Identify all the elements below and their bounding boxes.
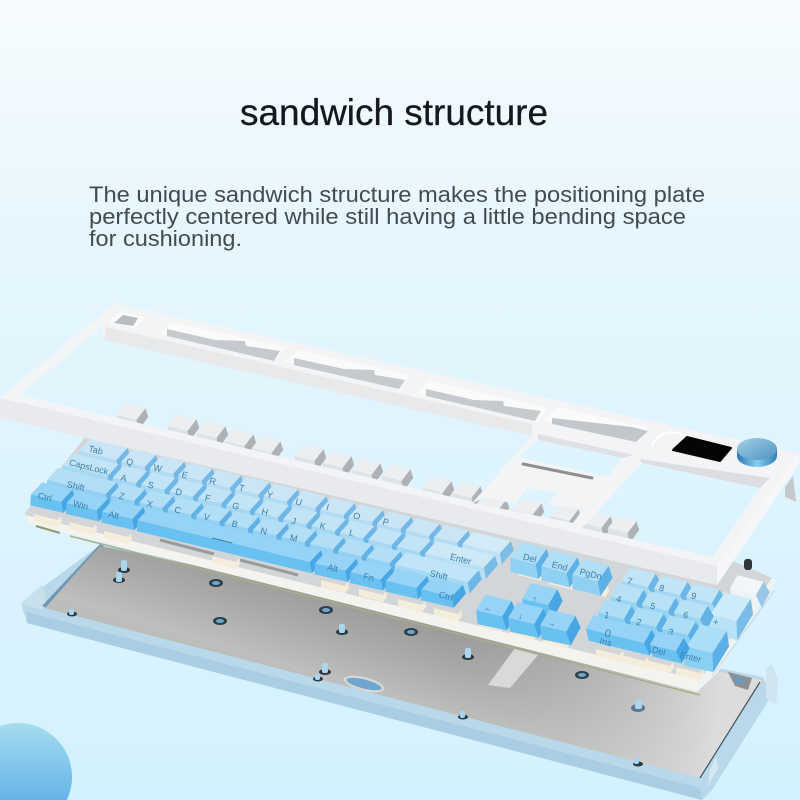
- row: caps legends: G: [231, 500, 240, 512]
- right bar front face: [717, 453, 800, 585]
- numeric keypad: 6: [682, 610, 689, 621]
- numeric keypad: 5: [649, 601, 656, 612]
- standoff posts: [67, 560, 645, 766]
- description text: perfectly centered while still having a little bending space: [89, 204, 686, 229]
- function row white keycaps: [108, 403, 647, 544]
- row: tab legends: R: [208, 475, 218, 487]
- corner bracket: [728, 672, 752, 690]
- row: shift keys: [36, 468, 492, 594]
- board shadow line: [36, 526, 60, 533]
- right rail light tab: [766, 664, 778, 704]
- right rail dark gap: [700, 682, 760, 778]
- title: sandwich structure: [240, 92, 548, 133]
- row: tab legends: Q: [125, 456, 134, 468]
- navigation keys: PgDn: [579, 567, 603, 582]
- row: caps legends: D: [174, 486, 184, 498]
- numeric keypad: 3: [667, 627, 674, 638]
- row: tab legends: W: [152, 462, 164, 474]
- row: shift legends: N: [259, 525, 268, 537]
- row: tab legends: Tab: [87, 443, 104, 457]
- bottom case tray: [21, 544, 778, 800]
- numeric keypad: +: [712, 617, 719, 628]
- row: bottom legends: Win: [72, 498, 89, 512]
- row: bottom legends: Fn: [362, 571, 375, 583]
- rear slot recess 2: [285, 350, 410, 388]
- numeric keypad: [576, 551, 778, 673]
- row: caps legends: K: [319, 521, 327, 532]
- numeric keypad: 8: [658, 583, 665, 594]
- circuit board layer: [25, 437, 777, 695]
- row: caps legends: H: [260, 506, 269, 518]
- arrow keys: ↑: [531, 594, 538, 604]
- oval slot: [342, 672, 386, 696]
- row: bottom legends: Ctrl: [438, 590, 454, 603]
- front face of rear bar: [104, 327, 532, 436]
- navigation keys: Del: [522, 552, 537, 565]
- row: caps legends: [68, 457, 472, 567]
- row: shift legends: Shift: [66, 479, 86, 493]
- row: shift legends: X: [146, 499, 154, 510]
- row: bottom keys: [20, 482, 476, 608]
- navigation keys: [499, 542, 623, 596]
- numeric keypad: 0: [603, 628, 612, 641]
- row: shift legends: [66, 479, 449, 582]
- row: shift legends: C: [173, 504, 183, 516]
- right clip: [785, 476, 796, 502]
- board surface: [25, 437, 777, 692]
- row: caps legends: A: [120, 473, 128, 484]
- row: shift legends: M: [289, 532, 299, 544]
- numeric keypad: Enter: [679, 650, 702, 665]
- frame body: [0, 303, 800, 585]
- arrow keys: [466, 583, 590, 646]
- window lip strips: [538, 434, 634, 458]
- arrow keys: →: [546, 617, 557, 629]
- row: shift legends: Z: [118, 491, 126, 502]
- top white frame: [0, 303, 800, 585]
- volume knob: [737, 438, 777, 467]
- transparent side edge: [697, 578, 777, 692]
- spacebar gap strips: [160, 540, 214, 554]
- numeric keypad: 2: [635, 617, 642, 628]
- switch stems: [34, 514, 704, 680]
- row: tab legends: O: [352, 510, 361, 522]
- row: tab legends: E: [181, 470, 189, 481]
- row: shift legends: B: [231, 519, 239, 530]
- row: bottom legends: Alt: [107, 509, 121, 521]
- grey slit: [523, 464, 592, 478]
- row: shift legends: Shift: [429, 568, 449, 582]
- row: caps keys: [52, 453, 508, 579]
- description text: The unique sandwich structure makes the positioning plate: [89, 182, 705, 207]
- description text: for cushioning.: [89, 226, 242, 251]
- navigation keys: End: [551, 559, 569, 573]
- description text: [89, 182, 705, 251]
- screw holes: [209, 579, 589, 679]
- raised curve near display: [652, 432, 682, 446]
- row: caps legends: CapsLock: [68, 457, 110, 477]
- steel plate: [45, 546, 763, 778]
- rear slot recess 3: [417, 380, 548, 422]
- arrow keys: ←: [483, 602, 494, 614]
- decorative blue circle: [0, 723, 72, 800]
- board front lip: [25, 515, 700, 692]
- row: tab legends: T: [238, 483, 246, 494]
- row: shift legends: V: [203, 512, 211, 523]
- rear slot recess 4: [543, 407, 650, 443]
- row: caps legends: F: [204, 493, 212, 504]
- front face of front bar: [0, 398, 717, 585]
- plate slot: [488, 648, 538, 688]
- row: tab legends: P: [382, 517, 390, 528]
- rear knob stem: [744, 559, 752, 570]
- row: bottom legends: [37, 491, 454, 603]
- display screen: [673, 437, 731, 461]
- left rail shadow: [42, 544, 104, 608]
- row: bottom legends: Ctrl: [37, 491, 53, 504]
- small rear window: [108, 311, 145, 328]
- numeric keypad: 9: [690, 591, 697, 602]
- row: tab legends: [87, 443, 390, 528]
- row: tab keys: [68, 439, 524, 565]
- row: caps legends: S: [147, 480, 155, 491]
- arrow keys: ↓: [517, 611, 524, 621]
- row: tab legends: Y: [266, 490, 274, 501]
- row: bottom legends: Alt: [326, 562, 340, 574]
- tray rail: [21, 545, 772, 800]
- numeric keypad: 1: [603, 610, 610, 621]
- row: caps legends: Enter: [449, 552, 472, 567]
- numeric keypad: 7: [626, 576, 633, 587]
- numeric keypad: Del: [651, 645, 666, 658]
- rear slot recess 1: [158, 322, 285, 360]
- main keycap block: [20, 439, 524, 608]
- row: tab legends: U: [294, 496, 303, 508]
- row: caps legends: L: [348, 528, 355, 539]
- numeric keypad: 4: [615, 594, 622, 605]
- row: caps legends: J: [290, 516, 297, 526]
- left corner tab: [21, 585, 46, 610]
- numeric keypad: Ins: [599, 636, 613, 649]
- row: tab legends: I: [325, 502, 330, 512]
